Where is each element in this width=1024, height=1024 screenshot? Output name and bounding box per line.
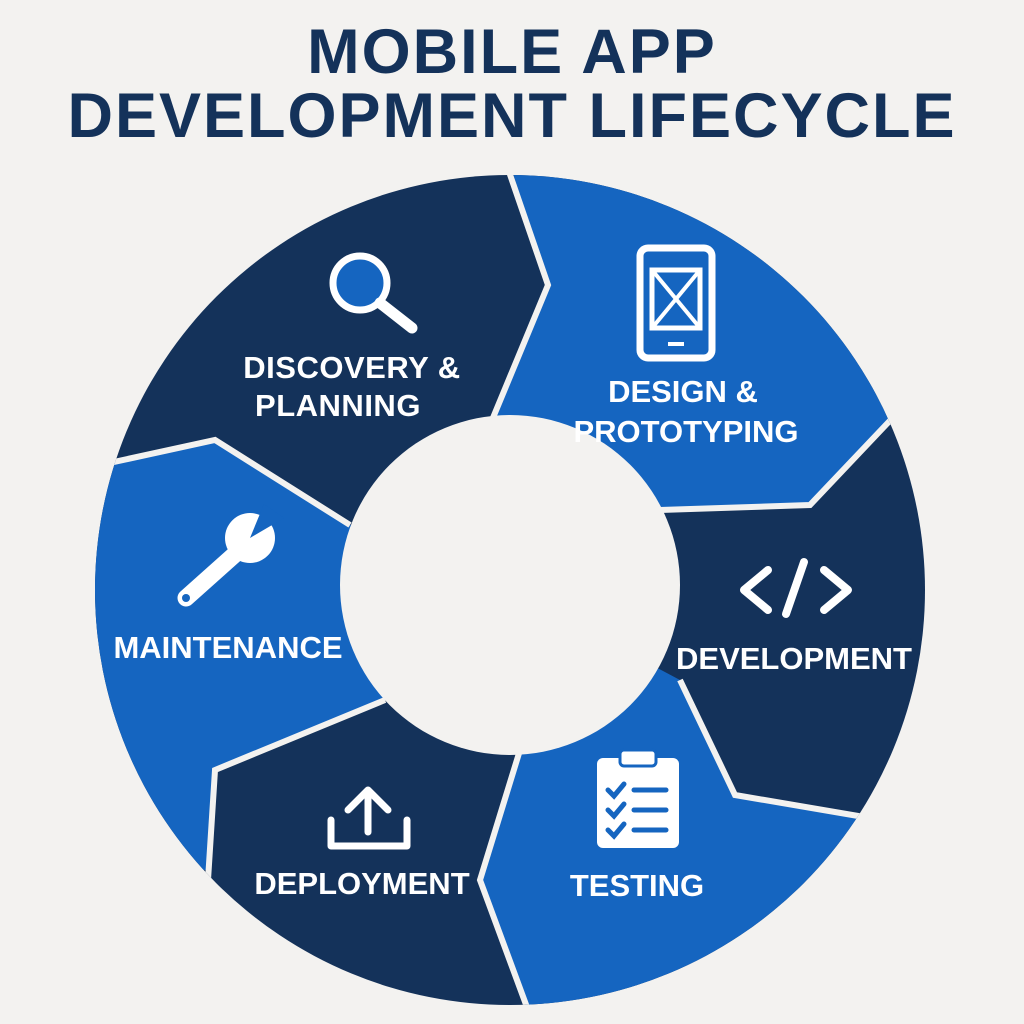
icon: phone wireframe [640, 248, 712, 358]
icon: code [744, 562, 848, 614]
title: DEVELOPMENT LIFECYCLE [67, 81, 957, 151]
label: design: DESIGN & [608, 374, 758, 409]
label: maintenance: MAINTENANCE [113, 630, 343, 665]
title: MOBILE APP [307, 17, 717, 87]
inner hole [340, 415, 680, 755]
title [67, 17, 957, 151]
label: development: DEVELOPMENT [676, 641, 912, 676]
segment: testing [483, 668, 858, 1005]
segment: maintenance [95, 443, 383, 870]
label: design: PROTOTYPING [573, 414, 799, 449]
label: testing: TESTING [570, 868, 704, 903]
segment: design [497, 175, 889, 507]
label: deployment: DEPLOYMENT [254, 866, 470, 901]
icon: upload [331, 790, 407, 846]
label: discovery: DISCOVERY & [243, 350, 461, 385]
icon: checklist [597, 750, 679, 848]
icon: magnifier [333, 256, 412, 328]
label: discovery: PLANNING [255, 388, 421, 423]
lifecycle wheel [95, 175, 925, 1005]
icon: wrench [182, 504, 284, 602]
